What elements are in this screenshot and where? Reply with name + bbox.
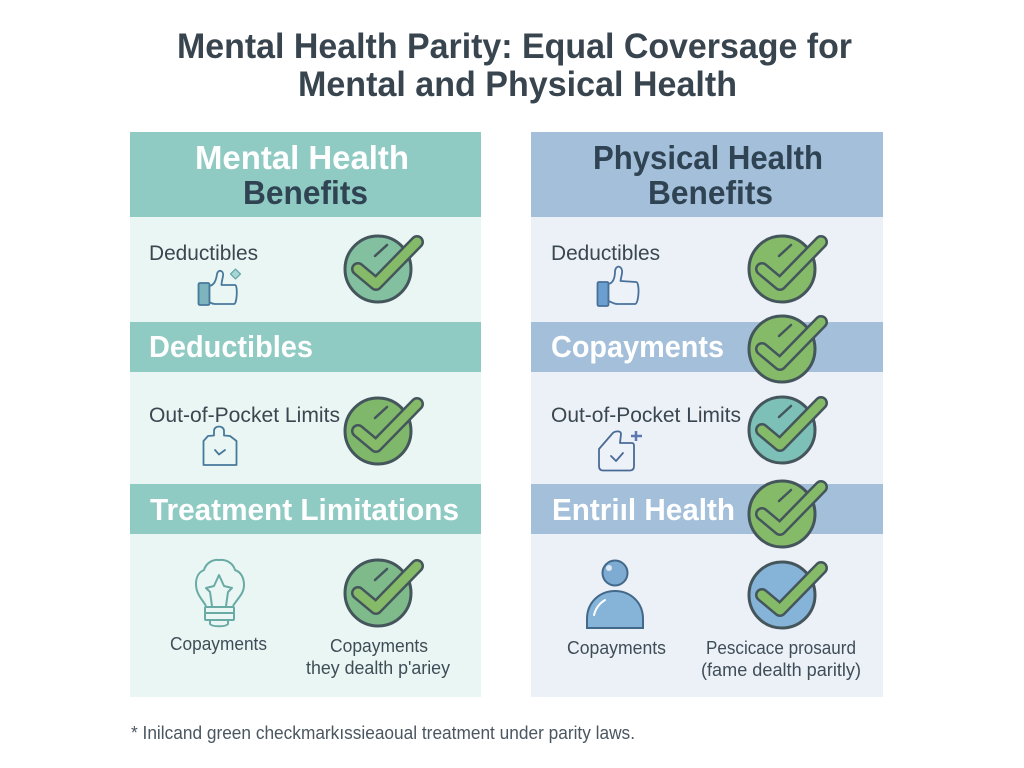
icon: check badge	[345, 398, 417, 464]
mental health header: Mental Health	[195, 139, 409, 176]
title: Mental Health Parity: Equal Coversage for	[177, 27, 852, 66]
icon: person	[587, 560, 643, 628]
icon: check badge	[749, 481, 821, 547]
icon: thumbs up	[598, 267, 639, 306]
footnote: * Inilcand green checkmarkıssieaoual treatment under parity laws.	[131, 723, 635, 743]
band: deductibles	[130, 322, 481, 372]
caption: physical parity	[701, 638, 861, 680]
band: copayments	[531, 322, 883, 372]
icon: pocket	[204, 426, 236, 465]
label: copayments: Copayments	[170, 634, 267, 654]
caption: copayments parity: Copayments	[330, 636, 428, 656]
title	[177, 27, 852, 104]
icon: light bulb	[196, 560, 244, 626]
icon: thumb check	[599, 431, 642, 470]
physical health header: Benefits	[648, 174, 773, 211]
caption: copayments parity: they dealth p'ariey	[306, 658, 450, 678]
label: out-of-pocket limits: Out-of-Pocket Limits	[149, 404, 340, 427]
band: treatment limitations: Treatment Limitations	[150, 492, 459, 527]
caption: physical parity: Pescicace prosaurd	[706, 638, 856, 658]
icon: check badge	[345, 236, 417, 302]
caption: physical parity: (fame dealth paritly)	[701, 660, 861, 680]
icon: thumbs up	[198, 269, 240, 305]
band: entrial health: Entriıl Health	[552, 492, 735, 527]
physical health header: Physical Health	[593, 139, 823, 176]
label: copayments: Copayments	[567, 638, 666, 658]
band: entrial health	[531, 484, 883, 534]
mental health header: Benefits	[243, 174, 368, 211]
icon: check badge	[749, 562, 821, 628]
physical health header	[531, 132, 883, 217]
label: out-of-pocket limits: Out-of-Pocket Limits	[551, 404, 741, 427]
band: copayments: Copayments	[551, 329, 724, 364]
icon: check badge	[749, 316, 821, 382]
caption: copayments parity	[306, 636, 450, 678]
band: deductibles: Deductibles	[149, 329, 313, 364]
mental health header	[130, 132, 481, 217]
icon: check badge	[749, 236, 821, 302]
panel: physical health benefits	[531, 132, 883, 697]
band: treatment limitations	[130, 484, 481, 534]
label: deductibles: Deductibles	[551, 242, 660, 265]
panel: mental health benefits	[130, 132, 481, 697]
title: Mental and Physical Health	[298, 65, 737, 104]
icon: check badge	[749, 397, 821, 463]
icon: check badge	[345, 560, 417, 626]
label: deductibles: Deductibles	[149, 242, 258, 265]
